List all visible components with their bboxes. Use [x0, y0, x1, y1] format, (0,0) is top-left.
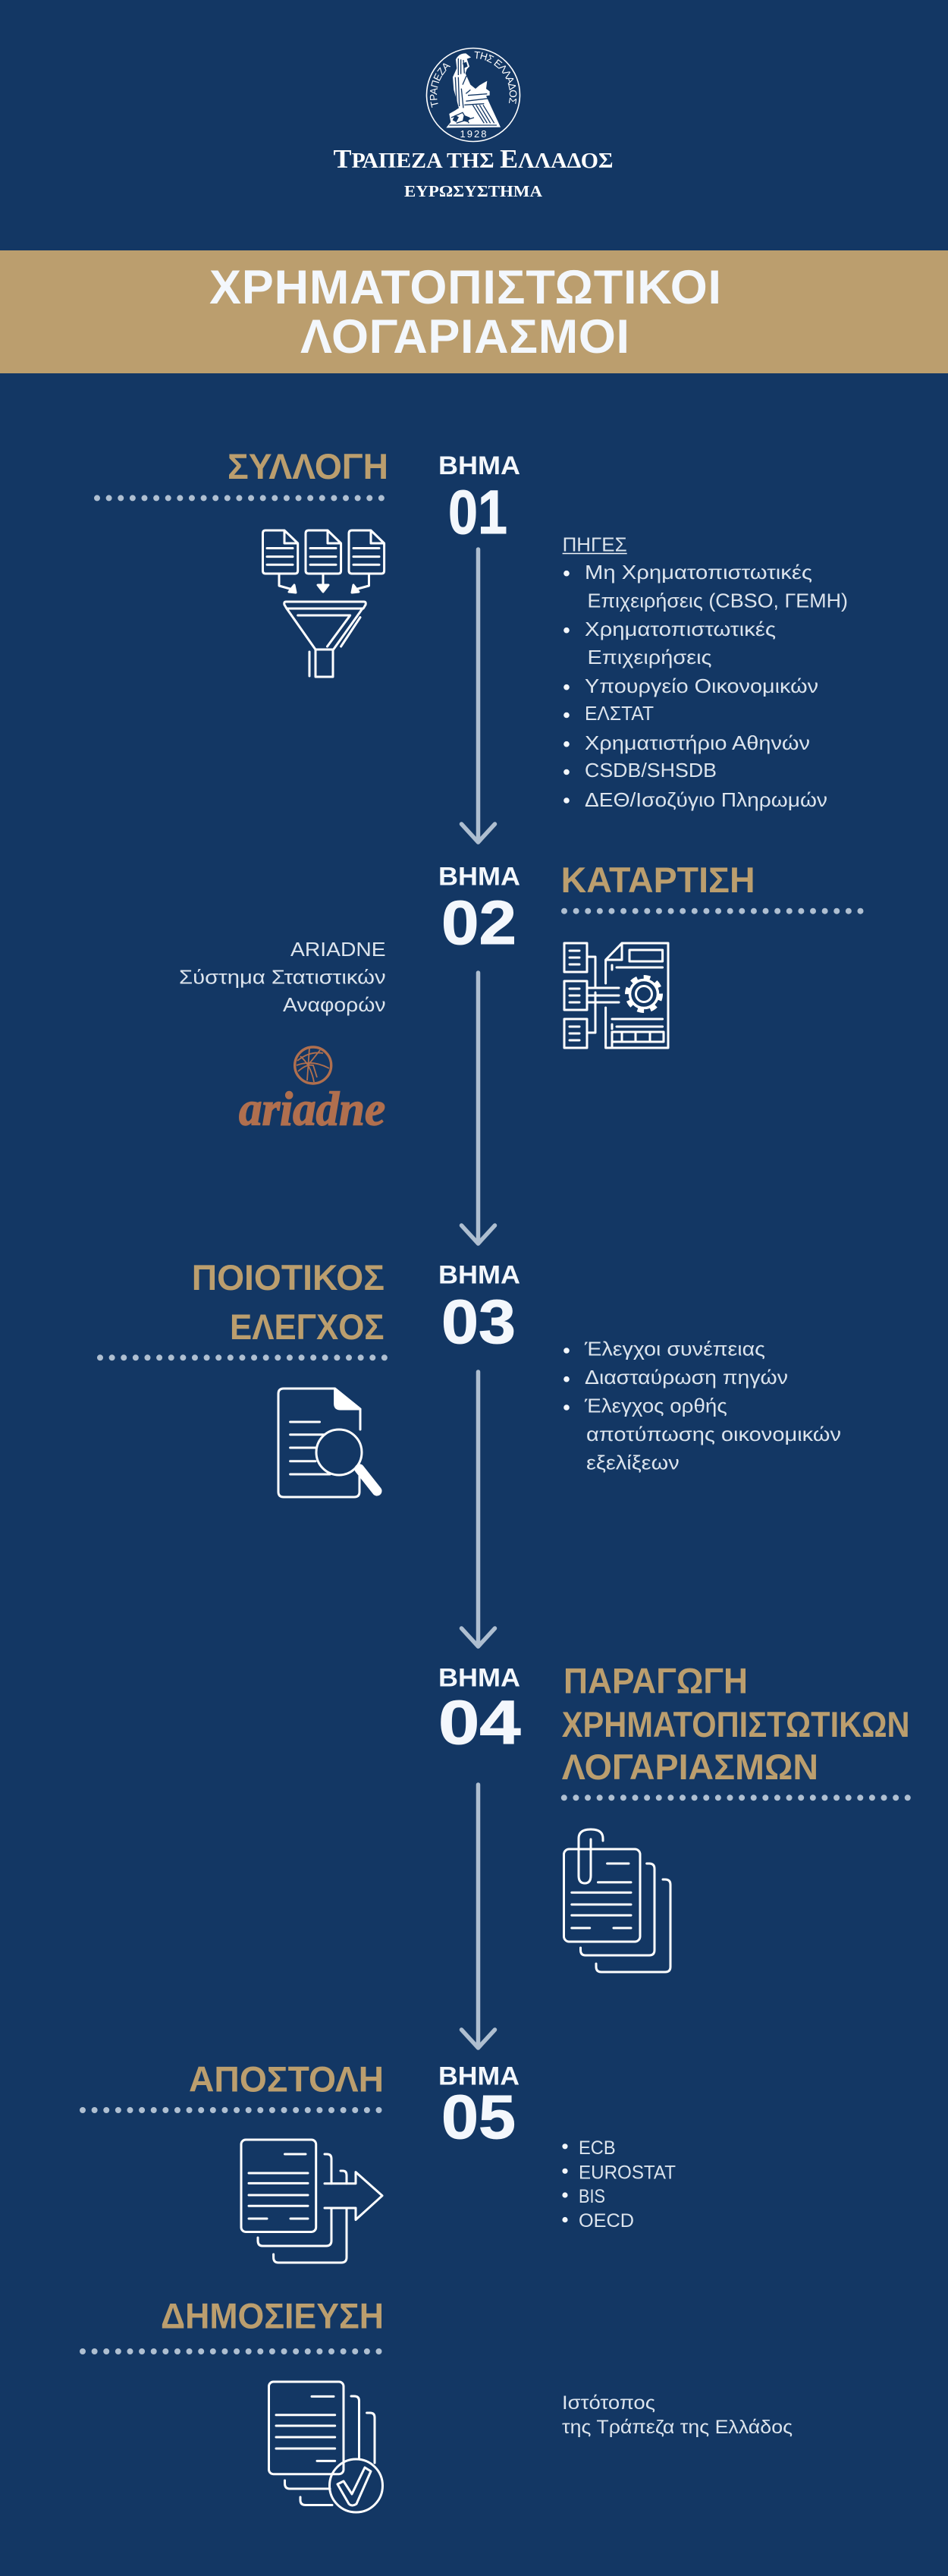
icon: document with magnifier: [278, 1389, 377, 1497]
text: sources list: Επιχειρήσεις: [587, 646, 711, 668]
arrow: step 3 to step 4: [461, 1372, 494, 1647]
text: recipients list: ECB: [579, 2137, 616, 2159]
heading: production of financial accounts: [562, 1662, 910, 1788]
heading: publication: ΔΗΜΟΣΙΕΥΣΗ: [161, 2297, 384, 2337]
step label 1: ΒΗΜΑ: [438, 451, 520, 480]
step label 4: ΒΗΜΑ: [438, 1664, 520, 1693]
icon: documents with send arrow: [241, 2140, 382, 2263]
heading: quality control: ΠΟΙΟΤΙΚΟΣ: [192, 1258, 385, 1298]
logo: ariadne: [239, 1047, 385, 1136]
icon: seal of the Bank of Greece: 1928: [460, 128, 488, 140]
text: Ariadne description: ARIADNE: [290, 938, 386, 961]
text: sources list: Επιχειρήσεις (CBSO, ΓΕΜΗ): [587, 589, 848, 612]
text: recipients list: EUROSTAT: [579, 2162, 676, 2183]
panel: step 4 production: [438, 1662, 910, 2048]
text: sources list: Υπουργείο Οικονομικών: [585, 675, 818, 697]
title: ΛΟΓΑΡΙΑΣΜΟΙ: [300, 310, 629, 363]
step label 3: [438, 1261, 520, 1357]
heading: compilation: ΚΑΤΑΡΤΙΣΗ: [561, 860, 755, 901]
text: sources list: CSDB/SHSDB: [585, 759, 717, 782]
panel: step 1 collection: [97, 447, 848, 842]
text: recipients list: BIS: [579, 2186, 605, 2207]
title: [209, 261, 721, 363]
arrow: step 1 to step 2: [461, 549, 494, 842]
arrow: step 4 to step 5: [461, 1785, 494, 2048]
text: Ariadne description: [179, 938, 386, 1016]
step label 1: 01: [448, 478, 507, 547]
text: Ariadne description: Αναφορών: [283, 993, 386, 1016]
arrow: step 2 to step 3: [461, 973, 494, 1244]
text: website note: της Τράπεζα της Ελλάδος: [562, 2417, 793, 2438]
panel: step 5 transmission: [83, 2059, 676, 2263]
panel: step 2 compilation: [179, 860, 862, 1244]
text: sources list: ΠΗΓΕΣ: [563, 533, 627, 555]
text: checks list: αποτύπωσης οικονομικών: [586, 1423, 841, 1445]
text: website note: [562, 2392, 793, 2438]
step label 1: [438, 451, 520, 547]
icon: documents into funnel: [262, 530, 385, 677]
step label 2: [438, 863, 520, 958]
icon: documents with check mark: [268, 2382, 382, 2512]
step label 3: ΒΗΜΑ: [438, 1261, 520, 1290]
heading: transmission: ΑΠΟΣΤΟΛΗ: [189, 2059, 384, 2099]
subtitle: Eurosystem: ΕΥΡΩΣΥΣΤΗΜΑ: [404, 182, 543, 200]
text: sources list: Χρηματιστήριο Αθηνών: [585, 731, 810, 754]
heading: collection: ΣΥΛΛΟΓΗ: [228, 447, 388, 487]
header: Bank of Greece logo: [334, 47, 613, 200]
step label 4: 04: [438, 1688, 521, 1757]
icon: seal of the Bank of Greece: [426, 47, 520, 143]
text: checks list: [563, 1338, 841, 1474]
text: checks list: Διασταύρωση πηγών: [585, 1366, 788, 1389]
text: checks list: Έλεγχοι συνέπειας: [584, 1338, 765, 1360]
text: sources list: ΔΕΘ/Ισοζύγιο Πληρωμών: [585, 788, 827, 811]
icon: seal of the Bank of Greece: ΤΗΣ ΕΛΛΑΔΟΣ: [475, 52, 517, 104]
text: sources list: [563, 533, 848, 811]
bank name: ΤΡΑΠΕΖΑ ΤΗΣ ΕΛΛΑΔΟΣ: [334, 144, 613, 174]
text: sources list: Χρηματοπιστωτικές: [585, 618, 776, 640]
text: checks list: Έλεγχος ορθής: [584, 1395, 727, 1417]
heading: quality control: [192, 1258, 385, 1348]
step label 4: [438, 1664, 521, 1757]
text: checks list: εξελίξεων: [586, 1452, 680, 1474]
text: recipients list: OECD: [579, 2210, 634, 2232]
step label 2: 02: [441, 889, 516, 958]
logo: ariadne: ariadne: [239, 1082, 385, 1136]
panel: publication: [83, 2297, 793, 2512]
heading: production of financial accounts: ΠΑΡΑΓΩΓΗ: [563, 1662, 748, 1702]
step label 5: 05: [441, 2083, 516, 2152]
step label 5: [438, 2062, 520, 2152]
step label 2: ΒΗΜΑ: [438, 863, 520, 892]
icon: data board with gear: [564, 943, 668, 1048]
text: website note: Ιστότοπος: [562, 2392, 655, 2414]
heading: production of financial accounts: ΧΡΗΜΑΤΟΠΙΣΤΩΤΙΚΩΝ: [562, 1705, 910, 1745]
title: ΧΡΗΜΑΤΟΠΙΣΤΩΤΙΚΟΙ: [209, 261, 721, 314]
step label 3: 03: [441, 1288, 516, 1357]
text: sources list: Μη Χρηματοπιστωτικές: [585, 561, 812, 583]
step label 5: ΒΗΜΑ: [438, 2062, 520, 2091]
title banner: [0, 250, 948, 373]
panel: step 3 quality control: [100, 1258, 841, 1647]
text: recipients list: [562, 2137, 676, 2232]
text: sources list: ΕΛΣΤΑΤ: [585, 702, 654, 725]
icon: seal of the Bank of Greece: ΤΡΑΠΕΖΑ: [429, 63, 450, 108]
heading: quality control: ΕΛΕΓΧΟΣ: [230, 1307, 385, 1348]
text: Ariadne description: Σύστημα Στατιστικών: [179, 966, 386, 989]
heading: production of financial accounts: ΛΟΓΑΡΙΑΣΜΩΝ: [562, 1747, 818, 1788]
icon: clipped documents: [564, 1829, 670, 1972]
